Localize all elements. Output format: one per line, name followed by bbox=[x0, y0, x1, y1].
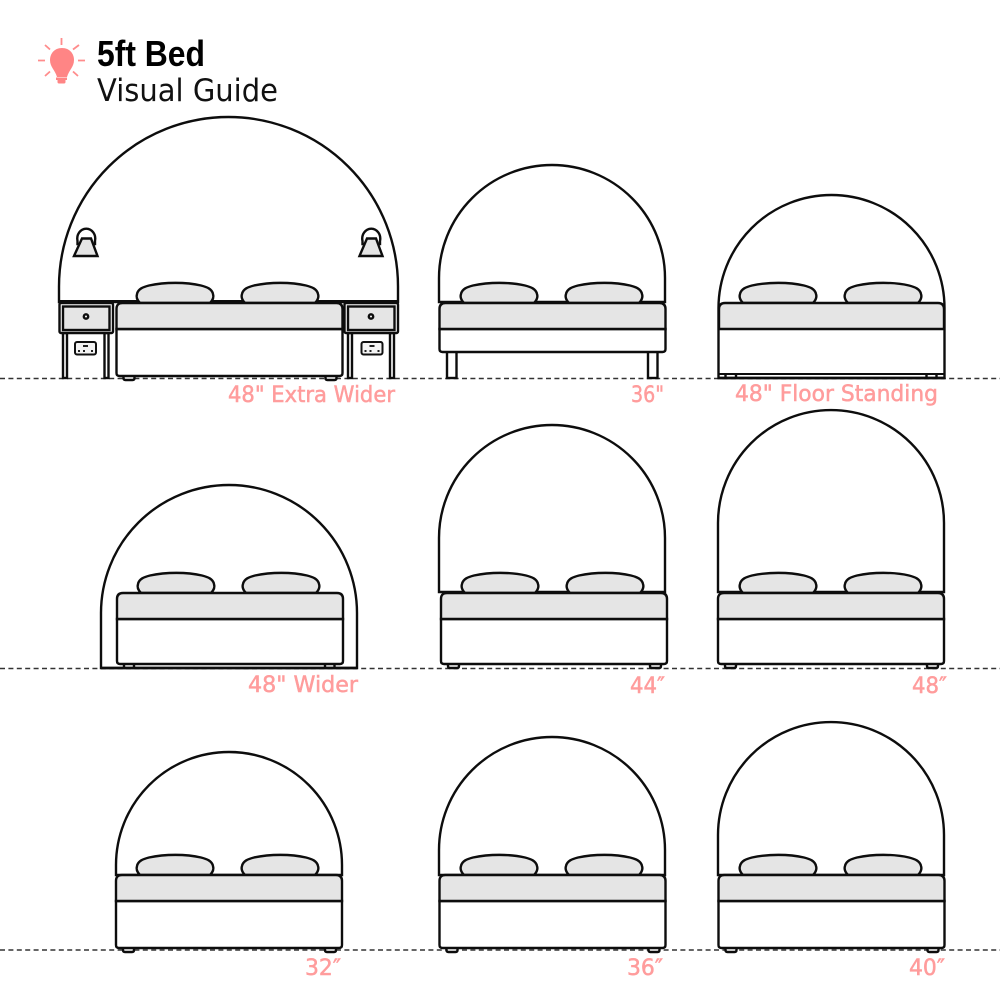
label: 32 inch: 32″ bbox=[305, 956, 341, 981]
subtitle: Visual Guide bbox=[97, 73, 278, 109]
label: 48 inch extra wider: 48" Extra Wider bbox=[228, 383, 396, 408]
bed: 32 inch bbox=[116, 752, 342, 952]
floor line: row 3 bbox=[0, 949, 1000, 951]
floor line: row 2 bbox=[0, 668, 1000, 670]
title: 5ft Bed bbox=[97, 33, 205, 74]
icon: light bulb bbox=[38, 38, 85, 84]
floor line: row 1 bbox=[0, 378, 1000, 380]
label: 48 inch wider: 48" Wider bbox=[248, 673, 359, 698]
nightstand: right bbox=[344, 303, 398, 378]
bed: 48 inch bbox=[718, 410, 944, 668]
label: 40 inch: 40″ bbox=[909, 956, 945, 981]
label: 48 inch: 48″ bbox=[912, 674, 947, 699]
bed: 40 inch bbox=[718, 722, 944, 952]
label: 36 inch row 3: 36″ bbox=[627, 956, 663, 981]
bed: 44 inch bbox=[439, 425, 667, 668]
bed: 48 inch floor standing bbox=[718, 195, 944, 378]
bed: 48 inch wider bbox=[101, 485, 357, 668]
wall lamp: left bbox=[74, 229, 98, 256]
wall lamp: right bbox=[360, 229, 382, 256]
bed: 48 inch extra wider with nightstands and lamps bbox=[59, 117, 398, 380]
bed: 36 inch on legs bbox=[439, 165, 666, 378]
label: 48 inch floor standing: 48" Floor Standing bbox=[735, 382, 938, 407]
bed: 36 inch bbox=[439, 737, 666, 952]
label: 36 inch: 36" bbox=[631, 383, 664, 408]
label: 44 inch: 44″ bbox=[630, 674, 665, 699]
nightstand: left bbox=[60, 303, 113, 378]
